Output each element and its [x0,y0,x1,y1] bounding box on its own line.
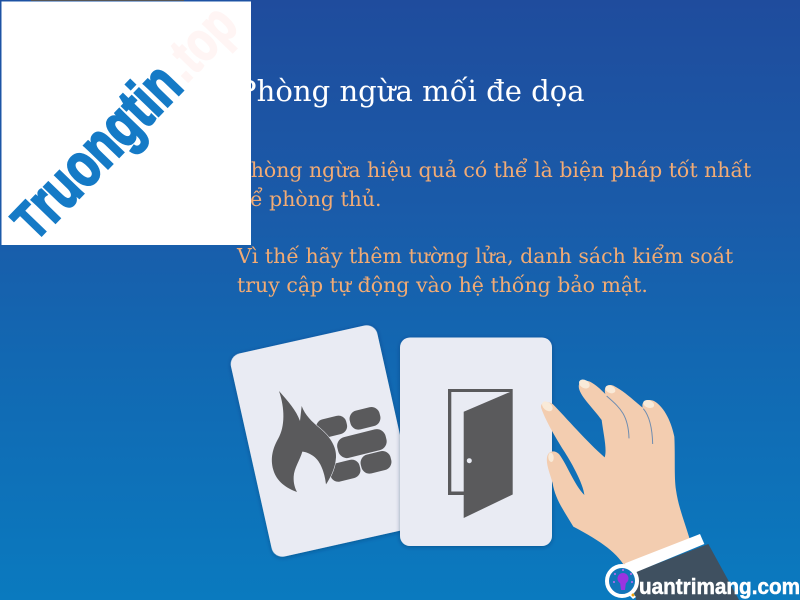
hand [541,381,690,570]
card: door [400,338,552,546]
icon: open door [448,389,513,518]
title: Phòng ngừa mối đe dọa [237,74,585,108]
text block: intro paragraph: Phòng ngừa hiệu quả có thể là biện pháp tốt nhất [237,158,751,182]
text block: advice paragraph: truy cập tự động vào hệ thống bảo mật. [237,273,648,297]
watermark text: ruongtin: ruongtin [13,50,195,235]
card: firewall [229,323,420,559]
fingernails [540,378,655,462]
finger creases [607,396,653,444]
text block: intro paragraph: để phòng thủ. [237,187,381,211]
watermark panel [0,0,251,250]
text block: intro paragraph [237,158,751,211]
sleeve [630,544,740,600]
text block: advice paragraph: Vì thế hãy thêm tường lửa, danh sách kiểm soát [237,244,733,268]
logo: Quantrimang [607,566,800,599]
text block: advice paragraph [236,244,734,297]
watermark text: T: T [2,193,60,250]
shirt cuff [625,534,704,575]
icon: firewall flame and bricks [272,391,393,492]
illustration: hand with sleeve [540,378,740,600]
icon: purple light bulb [613,569,633,590]
